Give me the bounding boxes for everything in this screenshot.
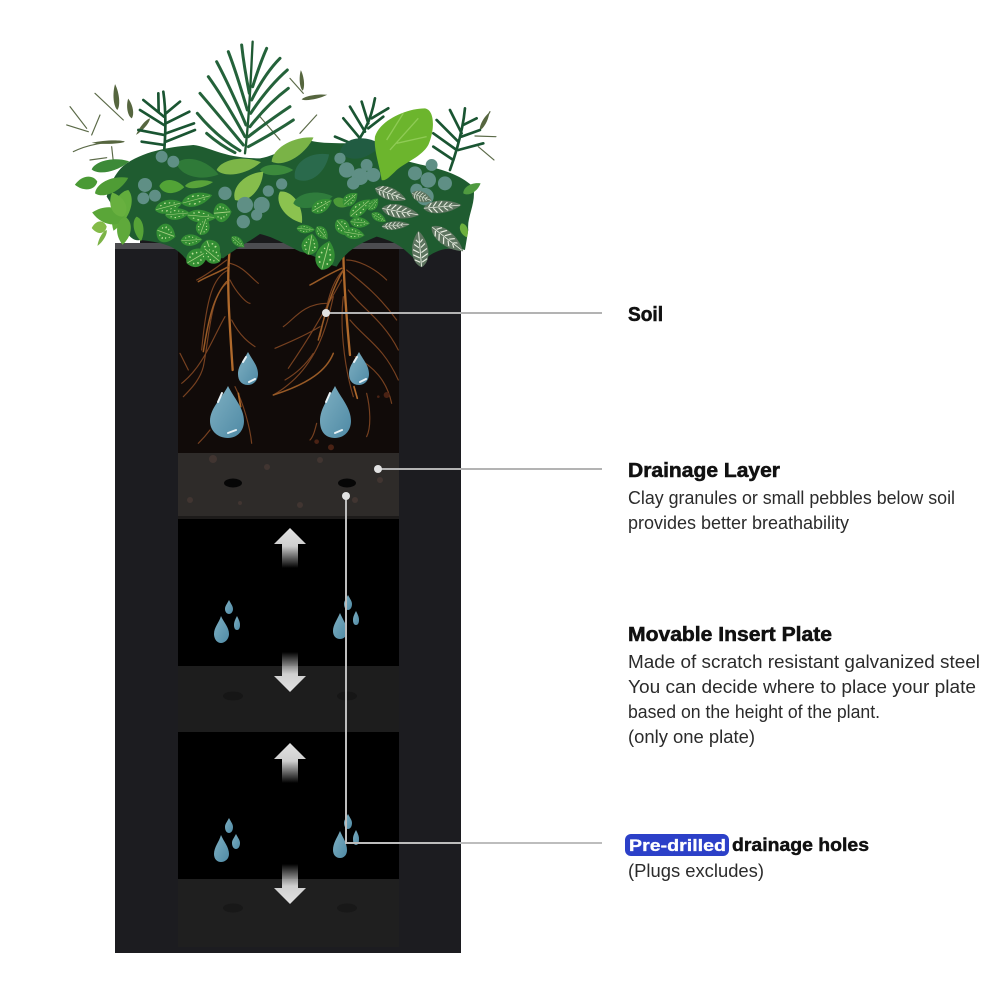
eucalyptus clusters <box>137 151 452 228</box>
label: pre-drilled drainage holes <box>625 834 869 881</box>
label: movable insert plate <box>628 624 980 747</box>
label: pre-drilled drainage holes: (Plugs excludes) <box>628 860 764 881</box>
foliage mass <box>107 140 474 267</box>
texture specks <box>187 455 383 508</box>
label: pre-drilled drainage holes: drainage holes <box>732 835 869 855</box>
panel: movable insert plate upper <box>178 666 399 732</box>
label: movable insert plate: Movable Insert Plate <box>628 624 832 646</box>
sprigs: narrow dark leaves <box>67 70 496 162</box>
drainage holes <box>224 478 242 488</box>
leader: drainage layer <box>374 465 602 473</box>
planter body <box>115 233 461 953</box>
water drops lower chamber <box>214 814 359 862</box>
badge: pre-drilled: Pre-drilled <box>629 836 726 855</box>
panel: lower air chamber <box>178 732 399 879</box>
water drops in soil <box>210 352 369 438</box>
panel: upper air chamber <box>178 519 399 666</box>
leader: pre-drilled holes <box>342 492 602 843</box>
arrow: down, upper chamber <box>274 652 306 692</box>
arrow: up, lower chamber <box>274 743 306 783</box>
label: drainage layer: Drainage Layer <box>628 460 780 482</box>
leader: soil <box>322 309 602 317</box>
label: movable insert plate: You can decide where to place your plate <box>628 676 976 697</box>
label: drainage layer: Clay granules or small pebbles below soil <box>628 487 955 508</box>
leaves: white veined <box>373 182 468 268</box>
arrow: down, lower chamber <box>274 864 306 904</box>
leaves: broad greens <box>74 130 483 247</box>
panel: drainage layer <box>178 453 399 519</box>
roots <box>180 253 398 450</box>
badge: pre-drilled <box>625 834 729 856</box>
label: movable insert plate: Made of scratch resistant galvanized steel <box>628 651 980 672</box>
palm: right-centre frond <box>333 98 388 147</box>
palm: right frond <box>433 108 483 170</box>
label: drainage layer <box>628 460 955 533</box>
leaf: monstera <box>375 108 433 180</box>
palm: large centre frond <box>197 42 293 153</box>
palm: left small frond <box>138 92 195 153</box>
arrow: up, upper chamber <box>274 528 306 568</box>
label: soil: Soil <box>628 304 663 326</box>
top rim <box>115 243 461 249</box>
panel: bottom plate <box>178 879 399 947</box>
planter interior behind foliage <box>140 233 440 243</box>
label: movable insert plate: (only one plate) <box>628 726 755 747</box>
panel: soil layer <box>178 249 399 453</box>
water drops upper chamber <box>214 595 359 643</box>
label: drainage layer: provides better breathability <box>628 512 850 533</box>
leaves: speckled <box>153 189 388 272</box>
plant arrangement <box>67 42 496 272</box>
label: movable insert plate: based on the height of the plant. <box>628 701 880 722</box>
